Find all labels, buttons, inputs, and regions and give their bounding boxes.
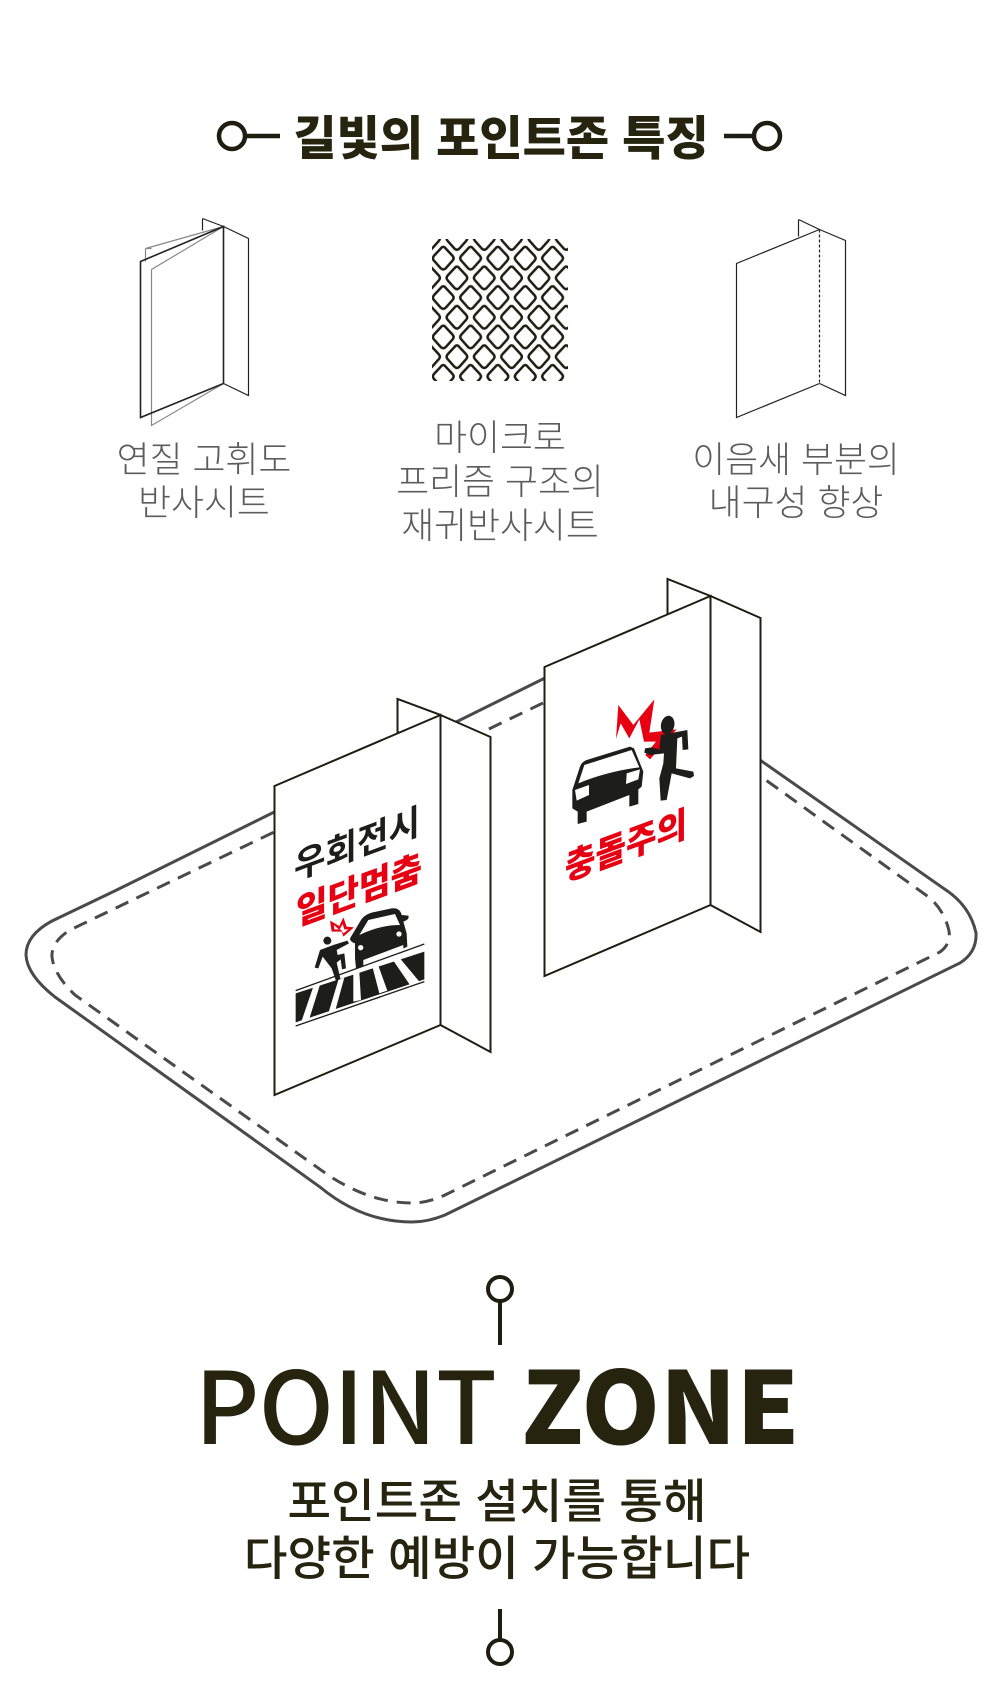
title left marker [219,123,280,149]
sign panels [544,579,760,976]
icon: folded sheet with dashed seam [736,220,846,418]
feature 2: microprism [396,239,604,549]
icon: impact burst and running pedestrian [616,699,694,801]
subtitle line 2: 다양한 예방이 가능합니다 [244,1520,750,1589]
title [219,100,780,169]
subtitle line 1: 포인트존 설치를 통해 [288,1463,706,1532]
sign: right, collision warning [544,579,760,976]
feature 1: high-brightness sheet [117,218,291,526]
floor dashed line [52,703,949,1203]
icon: folded layered sheet [140,218,248,426]
sign panels [274,699,490,1095]
title text: 길빛의 포인트존 특징 [293,100,709,169]
floor outline [26,677,976,1222]
label line 1: 마이크로 [434,409,566,461]
label line 1: 이음새 부분의 [692,431,900,483]
label line 3: 재귀반사시트 [401,497,599,549]
sign text line 2: 일단멈춤 [296,838,422,937]
feature 3: hinge durability [692,220,900,526]
heading: POINT ZONE: POINT ZONE [195,1328,799,1473]
sign text: 충돌주의 [565,794,687,892]
bottom connector marker [488,1609,512,1664]
icon: diamond microprism pattern [432,239,568,381]
label line 2: 내구성 향상 [709,474,883,526]
top connector marker [488,1277,512,1345]
title right marker [724,123,780,149]
label line 2: 반사시트 [138,474,270,526]
icon: car, pedestrian and crosswalk [296,908,424,1026]
icon: car [572,747,643,824]
sign: left, stop before turn [274,699,490,1095]
label line 2: 프리즘 구조의 [396,453,604,505]
illustration: point zone floor with signs [26,579,976,1222]
sign text line 1: 우회전시 [294,792,420,891]
label line 1: 연질 고휘도 [117,431,291,483]
